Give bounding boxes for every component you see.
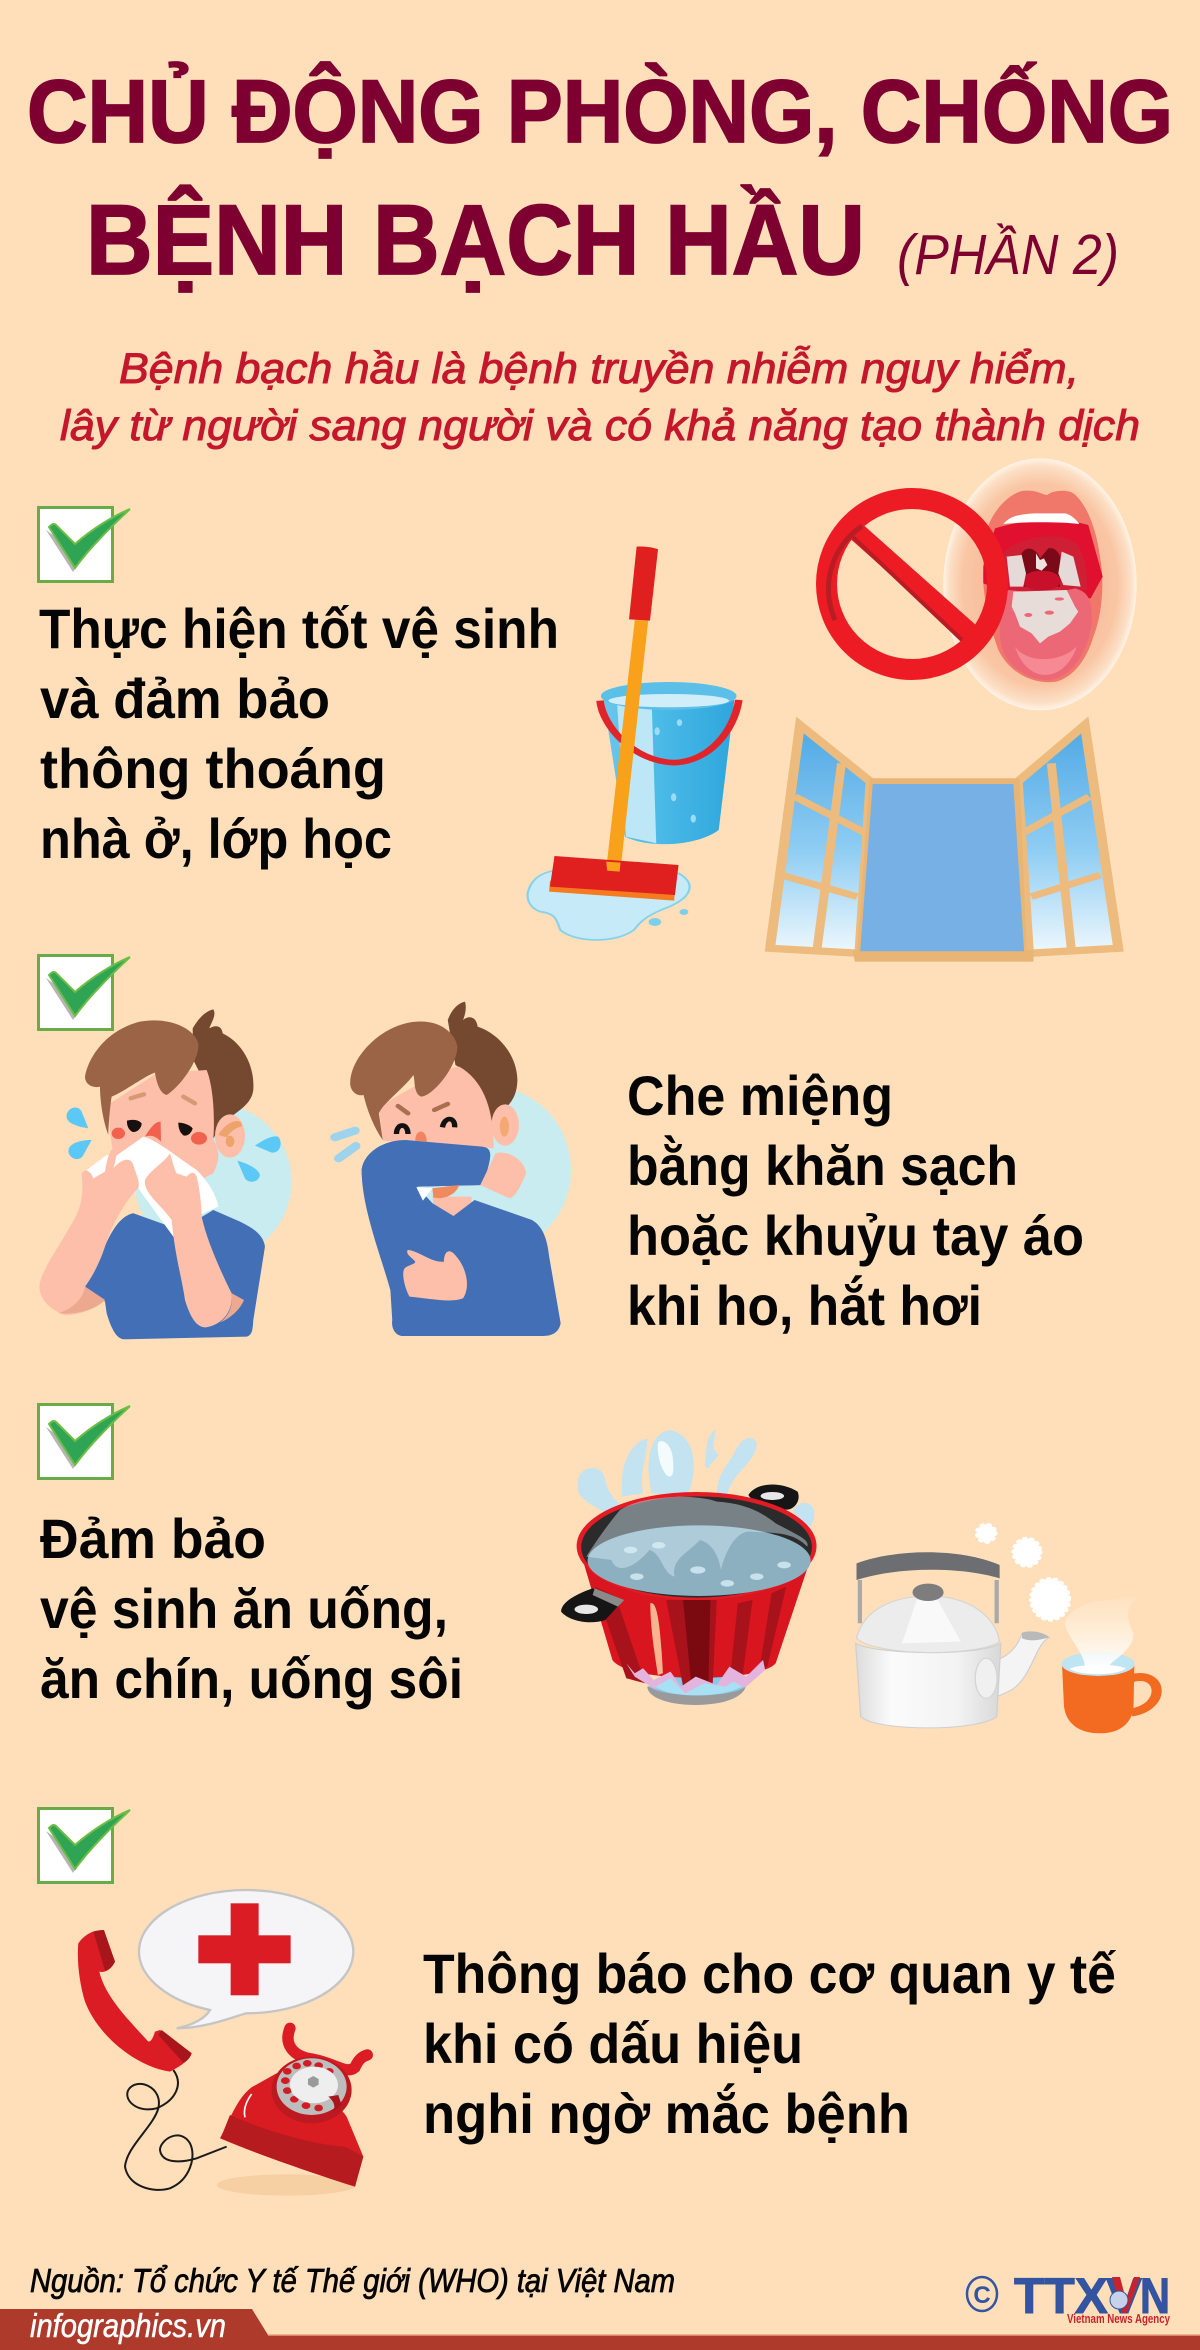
subtitle	[60, 345, 1140, 450]
logo: TTXVN: N	[1140, 2268, 1170, 2324]
icon: diseased throat	[943, 458, 1137, 710]
logo: TTXVN	[967, 2268, 1170, 2326]
text: food hygiene: Đảm bảo	[40, 1507, 266, 1570]
text: notify health authorities: khi có dấu hiệu	[423, 2012, 803, 2075]
text: food hygiene	[40, 1507, 463, 1710]
text: cover mouth: khi ho, hắt hơi	[627, 1274, 982, 1337]
logo: TTXVN: C	[973, 2282, 991, 2309]
logo: TTXVN: V	[1106, 2268, 1143, 2324]
icon: checkbox 4	[38, 1808, 130, 1882]
icon: boy coughing into elbow	[335, 1002, 571, 1336]
icon: telephone handset and cord	[78, 1930, 227, 2190]
text: hygiene and ventilation: Thực hiện tốt vệ sinh	[39, 597, 559, 660]
icon: checkbox 3	[38, 1404, 130, 1478]
icon: kettle	[856, 1525, 1068, 1728]
title: BỆNH BẠCH HẦU	[86, 184, 865, 295]
footer bar with website label	[0, 2307, 1200, 2350]
source text: Nguồn: Tổ chức Y tế Thế giới (WHO) tại Việt Nam	[30, 2262, 675, 2299]
subtitle: Bệnh bạch hầu là bệnh truyền nhiễm nguy hiểm,	[119, 345, 1079, 393]
text: hygiene and ventilation	[39, 597, 559, 870]
footer bar with website label: infographics.vn	[30, 2307, 226, 2344]
text: hygiene and ventilation: và đảm bảo	[40, 667, 330, 730]
text: food hygiene: vệ sinh ăn uống,	[40, 1577, 448, 1640]
text: cover mouth: Che miệng	[627, 1064, 893, 1127]
icon: boiling pot on flame	[561, 1430, 817, 1705]
icon: rotary telephone	[217, 2028, 367, 2196]
text: food hygiene: ăn chín, uống sôi	[40, 1647, 463, 1710]
text: hygiene and ventilation: nhà ở, lớp học	[40, 807, 392, 870]
icon: speech bubble with red cross	[139, 1890, 353, 2028]
text: cover mouth	[627, 1064, 1084, 1337]
title: (PHẦN 2)	[897, 222, 1119, 287]
icon: checkbox 1	[38, 508, 130, 582]
icon: prohibition sign	[826, 498, 998, 670]
text: cover mouth: bằng khăn sạch	[627, 1134, 1018, 1197]
subtitle: lây từ người sang người và có khả năng tạo thành dịch	[60, 402, 1140, 450]
logo: TTXVN: Vietnam News Agency	[1067, 2312, 1170, 2326]
icon: boy covering mouth with tissue	[39, 1009, 292, 1339]
text: cover mouth: hoặc khuỷu tay áo	[627, 1204, 1084, 1267]
text: notify health authorities: nghi ngờ mắc bệnh	[423, 2082, 910, 2145]
icon: open window	[770, 725, 1118, 962]
text: notify health authorities	[423, 1942, 1117, 2145]
text: notify health authorities: Thông báo cho cơ quan y tế	[423, 1942, 1117, 2005]
title	[27, 61, 1173, 295]
icon: mop and bucket	[528, 546, 739, 940]
icon: checkbox 2	[38, 956, 130, 1030]
logo: TTXVN: TTX	[1014, 2268, 1108, 2324]
text: hygiene and ventilation: thông thoáng	[40, 737, 386, 800]
icon: steaming mug	[1061, 1597, 1157, 1733]
